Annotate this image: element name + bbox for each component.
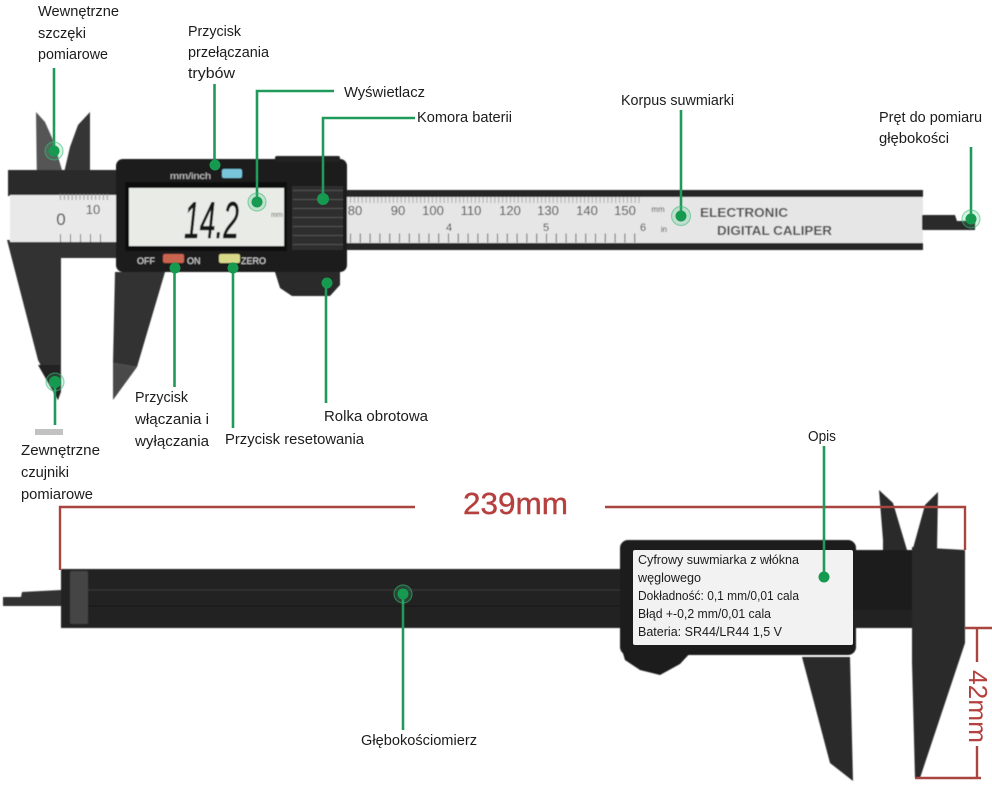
callout: caliper body: Korpus suwmiarki [621,93,734,109]
scale numbers: 90 [391,203,405,218]
specification label: Bateria: SR44/LR44 1,5 V [638,625,783,639]
top caliper photo [7,112,975,400]
scale numbers [348,203,667,234]
callout: outer jaws: czujniki [21,465,69,481]
scale numbers: 5 [543,222,549,234]
scale numbers: 4 [446,222,452,234]
scale numbers: 6 [640,222,646,234]
callout: caliper body [621,93,734,226]
specification label: węglowego [637,571,701,585]
thumb wheel [275,272,340,296]
callout: description [808,429,836,582]
callout: power button: Przycisk [135,390,189,406]
callout: reset button [225,262,365,448]
rear bars [850,550,915,610]
power button: OFF [137,256,155,266]
slider head: ON [187,256,200,266]
rear fixed jaw [912,547,965,778]
specification label: Błąd +-0,2 mm/0,01 cala [638,607,771,621]
main beam [340,190,923,250]
callout: inner jaws: pomiarowe [38,47,108,63]
callout: inner jaws: szczęki [38,26,86,42]
slider head: ZERO [241,256,266,266]
specification label [633,550,853,645]
left scale [10,195,116,242]
scale numbers: mm [651,205,665,214]
callout: inner jaws [38,4,119,160]
fixed jaws [7,112,118,400]
callout: display: Wyświetlacz [344,85,425,101]
slider head [116,156,347,272]
callout: inner jaws: Wewnętrzne [38,4,119,20]
rear head [620,540,856,655]
main beam: DIGITAL CALIPER [717,223,833,238]
rear upper jaws [879,490,938,552]
scale numbers: 140 [576,203,598,218]
dimension: 239mm: 239mm [463,486,568,521]
callout: power button [134,262,210,450]
scale numbers: 120 [499,203,521,218]
callout: thumb roller [322,278,429,425]
callout: mode button: Przycisk [188,24,242,40]
LCD display [125,182,287,251]
callout: depth rod: głębokości [879,131,949,147]
callout: mode button: przełączania [188,45,270,61]
callout: reset button: Przycisk resetowania [225,432,365,448]
caliper name: ELECTRONIC [700,205,789,220]
mode button: mm/inch [170,171,211,182]
rear movable jaw [802,657,853,781]
callout: thumb roller: Rolka obrotowa [324,409,429,425]
callout: description: Opis [808,429,836,445]
scale numbers: in [661,225,667,234]
scale numbers: 100 [422,203,444,218]
callout: mode button: trybów [188,66,236,82]
scale numbers: 110 [461,203,481,218]
zero button [219,254,240,263]
left scale: 0 [56,210,66,229]
scale numbers: 150 [614,203,636,218]
depth rod [922,215,975,230]
dimension: 42mm [915,628,992,778]
left scale: 10 [86,202,100,217]
movable lower jaw [113,272,165,400]
callout: depth rod [879,110,982,228]
callout: power button: włączania i [134,412,209,428]
callout: depth rod: Pręt do pomiaru [879,110,982,126]
specification label: Dokładność: 0,1 mm/0,01 cala [638,589,799,603]
callout: battery compartment [317,110,512,205]
depth rod back [3,590,61,606]
scale numbers: 130 [537,203,559,218]
smudge [35,429,63,435]
callout: outer jaws [21,373,100,503]
callout: mode button [188,24,270,170]
slider head: mm [271,212,283,219]
callout: display [248,85,425,211]
callout: depth gauge [361,585,477,749]
callout: power button: wyłączania [134,434,210,450]
callout: outer jaws: Zewnętrzne [21,443,100,459]
callout: outer jaws: pomiarowe [21,487,93,503]
bottom caliper photo [3,490,965,781]
beam back [61,569,623,628]
scale numbers: 80 [348,203,362,218]
callout: depth gauge: Głębokościomierz [361,733,477,749]
callout: battery compartment: Komora baterii [417,110,512,126]
specification label: Cyfrowy suwmiarka z włókna [638,553,799,567]
dimension: 239mm [60,486,965,570]
slider head: 14.2 [184,192,239,250]
